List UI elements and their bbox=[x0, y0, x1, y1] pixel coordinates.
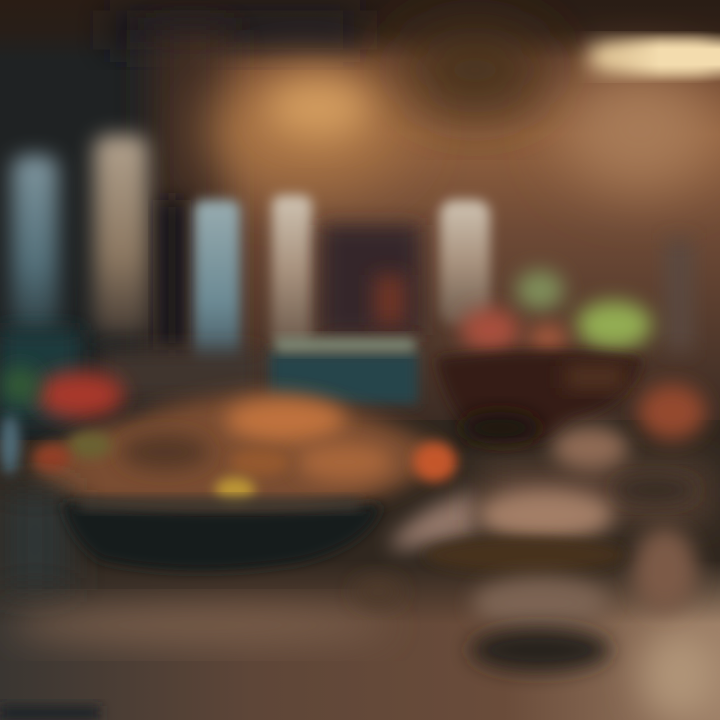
red tomato and greens at left bbox=[0, 367, 124, 475]
lower shelf teal dish bbox=[0, 330, 418, 420]
food mound on plate bbox=[30, 392, 457, 508]
wall light glow bbox=[205, 70, 405, 190]
dark plate bbox=[62, 498, 382, 571]
stacked bread and side plates bbox=[354, 384, 710, 672]
ceiling light top right bbox=[562, 32, 720, 190]
blurred bottles bbox=[12, 135, 693, 370]
dark bowl bbox=[436, 352, 642, 446]
salad in bowl bbox=[460, 270, 652, 352]
table surface bbox=[0, 490, 720, 720]
